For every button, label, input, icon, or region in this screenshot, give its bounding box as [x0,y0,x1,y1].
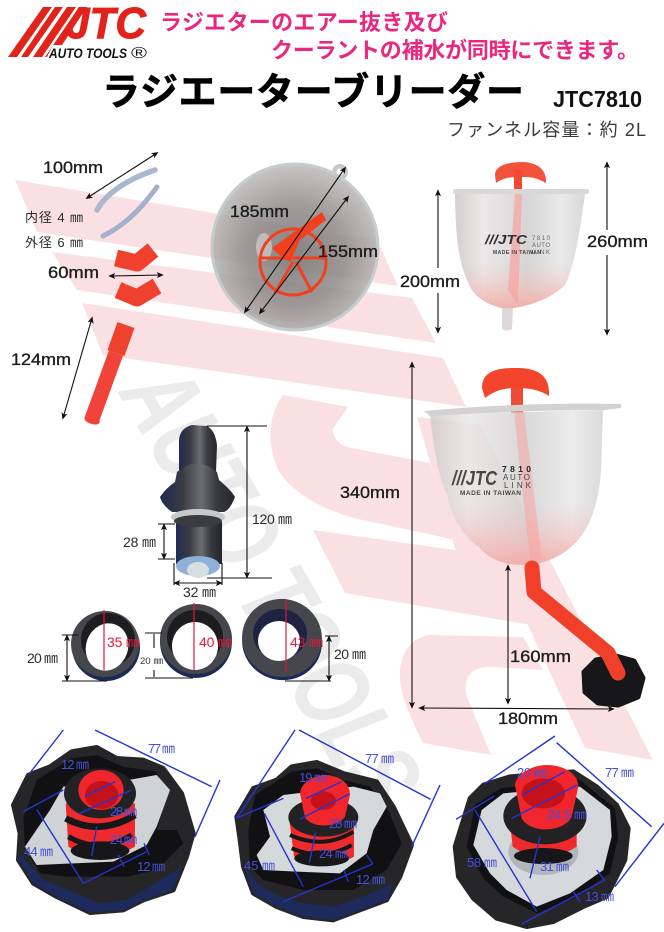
radiator cap 2: 12 ㎜ [356,872,385,887]
radiator cap 3: 31 ㎜ [540,859,569,874]
funnel side view with dimensions: AUTO [532,243,550,249]
radiator cap 1: 12 ㎜ [137,859,165,874]
funnel assembled with hose and cap: MADE IN TAIWAN [460,490,521,497]
JTC logo [8,0,147,62]
title: ラジエーターブリーダー [102,71,524,114]
ring 40 mm [140,603,232,678]
funnel side view with dimensions: ///JTC [484,232,528,247]
ring 35 mm: 35 ㎜ [107,634,140,650]
accessories: silicone tubes [25,153,157,250]
funnel top view: 155mm [318,242,378,261]
radiator cap 3: 58 ㎜ [467,855,497,870]
JTC logo: ® [131,45,147,62]
radiator cap 2: 24 ㎜ [319,846,348,861]
JTC logo: JTC [66,0,147,48]
accessories: silicone tubes: 内径 4 ㎜ [25,210,83,225]
ring 40 mm: 20 ㎜ [140,656,163,667]
funnel assembled with hose and cap: AUTO [503,473,530,482]
ring 35 mm: 20 ㎜ [27,650,58,666]
radiator cap 1: 44 ㎜ [24,844,53,859]
JTC logo: AUTO TOOLS [48,45,128,61]
radiator cap 1: 24 ㎜ [110,832,137,847]
ring 43 mm: 20 ㎜ [334,646,366,662]
funnel assembled with hose and cap: 180mm [498,709,558,728]
radiator cap 2: 45 ㎜ [244,858,275,873]
sealing rings with dimensions [27,590,366,689]
ring 35 mm [27,610,140,681]
radiator cap 2: 19 ㎜ [299,770,327,785]
radiator cap 3 [455,736,664,927]
bleeder adapter with dimensions [123,425,292,600]
accessories: red extension tube: 124mm [11,350,71,369]
pink headline: ラジエターのエアー抜き及び [160,10,448,35]
capacity note: ファンネル容量：約 2L [447,120,646,140]
radiator cap 2: 77 ㎜ [365,751,394,766]
ring 40 mm: 40 ㎜ [199,634,232,650]
radiator cap 1: 77 ㎜ [148,741,175,756]
funnel side view with dimensions: MADE IN TAIWAN [493,250,541,256]
radiator cap 1: 28 ㎜ [110,804,137,819]
funnel side view with dimensions: LINK [532,250,550,256]
radiator cap 3: 20 ㎜ [517,765,547,780]
radiator cap 1: 12 ㎜ [61,757,89,772]
funnel top view: 185mm [230,202,289,221]
funnel top view [212,164,378,330]
accessories: red extension tube [11,318,126,426]
accessories: red elbows [48,250,162,298]
accessories: silicone tubes: 100mm [43,158,103,177]
funnel side view with dimensions: 260mm [587,232,648,251]
radiator cap 2: 28 ㎜ [329,816,357,831]
funnel assembled with hose and cap: ///JTC [451,468,497,490]
funnel assembled with hose and cap [340,363,643,728]
pink headline: クーラントの補水が同時にできます。 [271,38,639,63]
accessories: red elbows: 60mm [48,263,99,282]
funnel assembled with hose and cap: LINK [504,481,532,490]
funnel assembled with hose and cap: 7810 [502,464,531,474]
funnel side view with dimensions: 200mm [400,272,460,291]
funnel assembled with hose and cap: 160mm [510,647,571,666]
funnel assembled with hose and cap: 340mm [340,483,400,502]
radiator cap 3: 13 ㎜ [585,889,614,904]
funnel side view with dimensions: 7810 [532,236,551,242]
background: pale red logo stripes [15,180,653,760]
bleeder adapter with dimensions: 120 ㎜ [252,511,292,527]
accessories: silicone tubes: 外径 6 ㎜ [25,235,83,250]
bleeder adapter with dimensions: 28 ㎜ [123,534,156,550]
ring 43 mm [233,590,366,689]
pink headline [160,10,639,63]
model number: JTC7810 [553,86,642,112]
bleeder adapter with dimensions: 32 ㎜ [183,584,216,600]
funnel side view with dimensions [400,162,648,334]
radiator cap 3: 77 ㎜ [605,765,634,780]
radiator cap 2 [237,730,440,920]
radiator cap 1 [13,730,220,913]
ring 43 mm: 43 ㎜ [290,634,323,650]
radiator cap 3: 24.5 ㎜ [547,807,587,822]
